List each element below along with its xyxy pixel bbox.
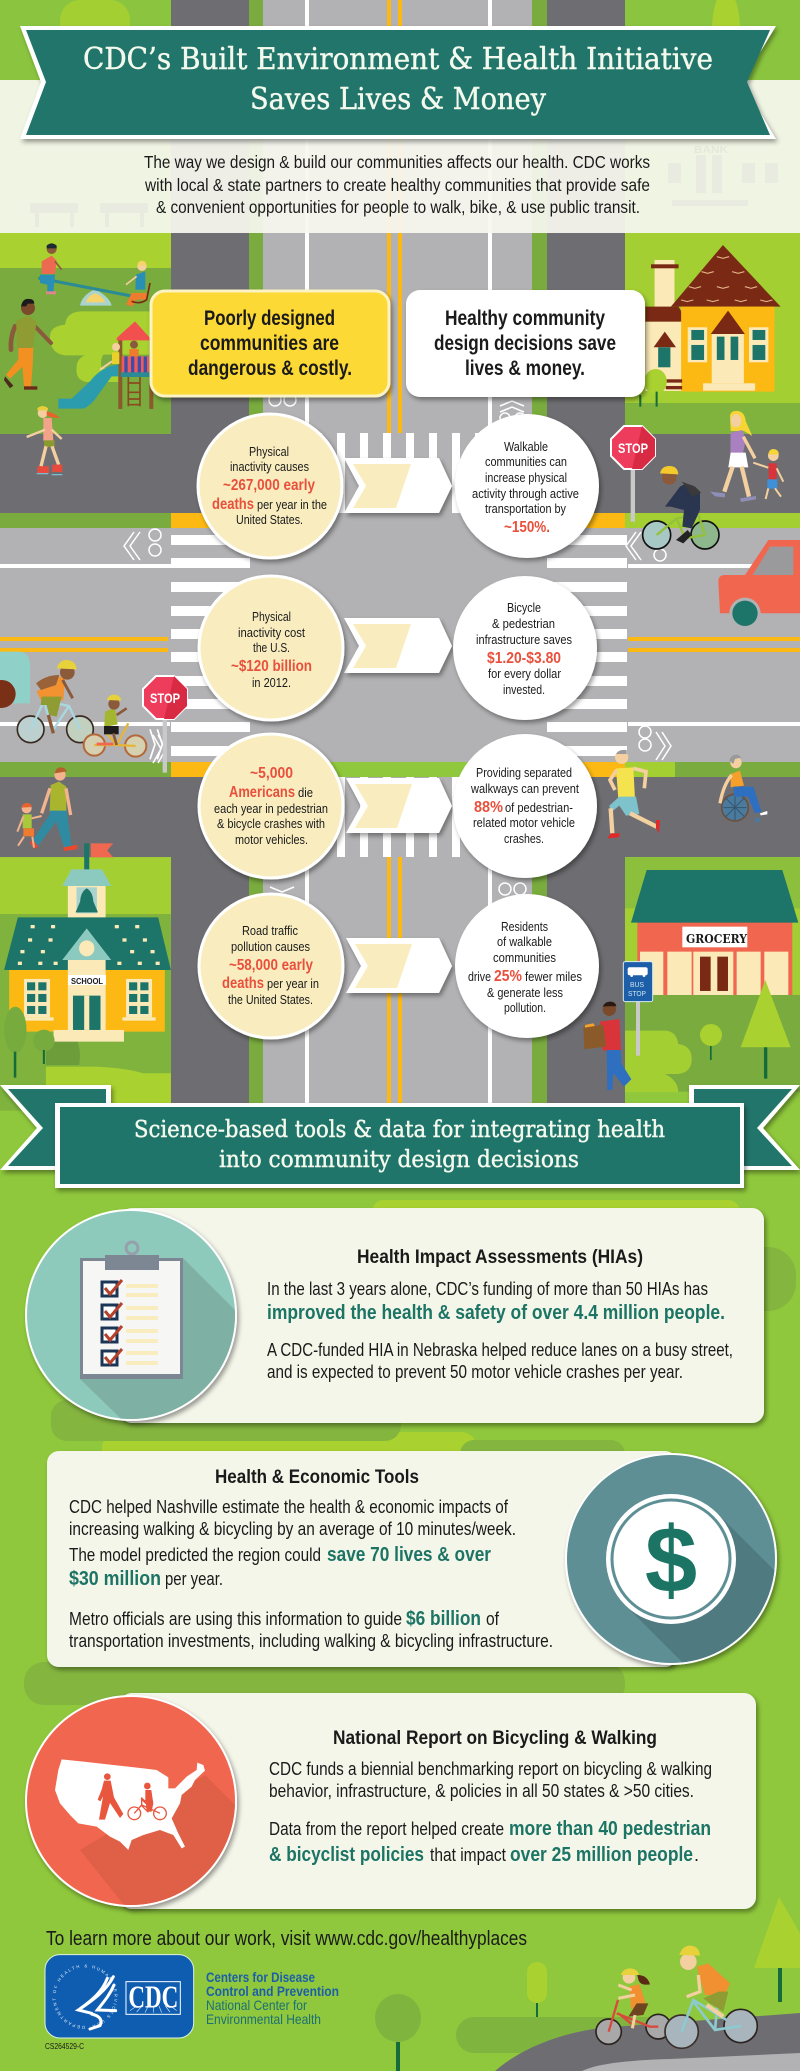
banner title text: CDC’s Built Environment & Health Initiative [83,42,713,77]
panel text: over 25 million people [510,1844,693,1866]
heading box: poorly designed: communities are [200,332,339,355]
child cyclist [596,1968,671,2044]
stop sign right [611,426,655,469]
circle: walkable residents: Residents [501,919,548,934]
heading box: poorly designed [151,291,389,396]
bike lane chevrons [150,729,162,759]
runner [607,750,660,838]
circle: walkable residents: 25% [494,968,522,985]
panel text: improved the health & safety of over 4.4 million people. [267,1302,725,1324]
child cyclist [84,695,146,757]
document code: CS264529-C [45,2042,84,2051]
section banner text [134,1117,665,1173]
circle: physical inactivity deaths: United States. [236,512,303,527]
circle: americans die: Americans [229,784,295,801]
icon: clipboard circle [24,1209,242,1426]
slide [58,365,118,409]
walking man [4,299,51,390]
stop sign post [631,467,635,522]
HHS and CDC logo: DEPARTMENT OF HEALTH & HUMAN SERVICES USA [52,1964,118,2029]
house roof [671,245,781,307]
heading box: poorly designed: Poorly designed [204,307,335,330]
school trees [4,1007,55,1078]
heading box: healthy community: design decisions save [434,332,616,355]
panel text: save 70 lives & over [327,1544,491,1566]
panel text [269,1759,712,1866]
banner wings [0,1085,800,1170]
panel text: Metro officials are using this information to guide [69,1609,402,1629]
circle: separated walkways: crashes. [504,831,544,846]
cyclist [643,466,719,549]
panel heading: Health Impact Assessments (HIAs) [357,1246,643,1268]
circle: walkable communities: increase physical [485,470,567,485]
wheelchair user [720,755,767,823]
adult cyclist [17,660,93,743]
circle: infrastructure saves: infrastructure saves [476,632,572,647]
father and child walking [17,767,77,851]
stop sign left [143,676,187,719]
circle: walkable residents: of walkable [497,934,552,949]
panel text: $6 billion [406,1608,481,1630]
bus stop label: BUS [630,982,644,989]
bush [50,311,152,382]
intro backdrop [0,80,800,233]
circle: separated walkways: Providing separated [476,765,572,780]
intro text: & convenient opportunities for people to walk, bike, & use public transit. [156,197,640,217]
circle: road traffic pollution: pollution causes [231,939,310,954]
panel heading: Health & Economic Tools [215,1466,419,1488]
panel text: and is expected to prevent 50 motor vehicle crashes per year. [267,1362,683,1382]
bus stop sign [623,962,653,1056]
circle: inactivity cost: inactivity cost [238,625,305,640]
school bell tower [62,869,111,938]
skater [27,406,62,475]
panel text: of [486,1609,500,1629]
panel heading: National Report on Bicycling & Walking [333,1727,657,1749]
panel text: transportation investments, including walking & bicycling infrastructure. [69,1631,553,1651]
house illustration [639,245,781,407]
circle: walkable residents: & generate less [487,985,563,1000]
lower decorative hills [24,1200,800,2071]
circle: separated walkways: 88% [474,799,503,816]
bus stop label: STOP [628,991,646,998]
icon: dollar coin [564,1453,782,1670]
circle: walkable residents [455,894,599,1038]
circle: walkable communities: activity through active [472,486,579,501]
circle: walkable communities: Walkable [504,439,548,454]
CDC organization text: Control and Prevention [206,1983,339,1999]
circle: separated walkways: walkways can prevent [470,781,579,796]
arrow row 3 [346,778,452,833]
circle: separated walkways [453,734,597,878]
panel text: increasing walking & bicycling by an average of 10 minutes/week. [69,1519,516,1539]
chimney [651,260,679,307]
panel text: behavior, infrastructure, & policies in all 50 states & >50 cities. [269,1781,694,1801]
circle: americans die: motor vehicles. [235,832,308,847]
trees [700,980,791,1079]
arrow row 2 [344,618,452,673]
section banner [0,1085,800,1188]
HHS and CDC logo [44,1954,194,2038]
panel text: more than 40 pedestrian [509,1818,711,1840]
house body [645,307,774,392]
panel: health impact assessments [24,1208,769,1429]
circle: inactivity cost: in 2012. [252,675,291,690]
arrow row 4 [346,938,452,993]
house shrub [639,369,667,407]
section banner text: Science-based tools & data for integrating health [134,1117,665,1143]
CDC organization text: Centers for Disease [206,1969,315,1985]
panel text [69,1497,553,1651]
circle: infrastructure saves: & pedestrian [492,616,555,631]
circle: physical inactivity deaths: Physical [249,444,289,459]
right street: stop sign, pedestrians, cyclist, car [631,411,800,629]
panel text: CDC funds a biennial benchmarking report on bicycling & walking [269,1759,712,1779]
seesaw [38,278,133,306]
CDC organization text: National Center for [206,1997,307,2013]
seesaw kid two [126,261,150,306]
circle: separated walkways: of pedestrian- [505,800,573,815]
teal car [0,652,30,708]
seesaw kid one [40,243,62,294]
icon: dollar coin: $ [645,1507,697,1612]
heading box: healthy community: lives & money. [465,357,585,380]
circle: physical inactivity deaths [198,414,342,558]
circle: walkable residents: fewer miles [525,969,582,984]
icon: US map circle [24,1695,242,1912]
red car [718,540,800,629]
circle: walkable residents: drive [468,969,491,984]
stop sign post left [163,719,167,773]
circle: inactivity cost: the U.S. [253,640,290,655]
heading box: healthy community [406,290,645,397]
circle: road traffic pollution: deaths [222,975,264,992]
circle: physical inactivity deaths: per year in the [257,497,327,512]
school label: SCHOOL [71,976,103,986]
panel text: CDC helped Nashville estimate the health & economic impacts of [69,1497,509,1517]
circle: walkable residents: communities [493,950,556,965]
circle: americans die: & bicycle crashes with [217,816,325,831]
heading box: healthy community: Healthy community [445,307,605,330]
stop sign left: STOP [150,690,180,706]
panel: health and economic tools [46,1451,782,1673]
title banner [20,26,776,139]
circle: road traffic pollution: per year in [267,976,319,991]
banner title text: Saves Lives & Money [250,82,546,117]
panel text: per year. [165,1569,223,1589]
adult cyclist [665,1946,757,2048]
street scene background [0,0,800,1107]
man with groceries [583,1002,631,1090]
circle: road traffic pollution [199,894,343,1038]
intro text: The way we design & build our communities affects our health. CDC works [144,152,650,172]
heading box: poorly designed: dangerous & costly. [188,357,352,380]
circle: infrastructure saves: for every dollar [488,666,562,681]
circle: americans die: die [298,785,313,800]
circle: infrastructure saves: invested. [503,682,545,697]
circle: inactivity cost: Physical [252,609,291,624]
footer call to action: To learn more about our work, visit www.cdc.gov/healthyplaces [46,1928,527,1950]
panel text [267,1279,733,1382]
circle: physical inactivity deaths: deaths [212,496,254,513]
panel text: In the last 3 years alone, CDC’s funding of more than 50 HIAs has [267,1279,708,1299]
CDC organization text [206,1969,339,2027]
grocery building [631,870,798,995]
school body [9,928,165,1042]
playground: seesaw, playset, walking man and skater [4,243,153,475]
circle: separated walkways: related motor vehicle [473,815,575,830]
grocery grounds [625,857,800,1092]
circle: inactivity cost: ~$120 billion [231,658,312,675]
panel text: $30 million [69,1568,161,1590]
circle: walkable communities: transportation by [485,501,566,516]
circle: walkable communities [455,414,599,558]
panel text: Data from the report helped create [269,1819,504,1839]
panel text: that impact [430,1845,506,1865]
circle: physical inactivity deaths: ~267,000 early [223,477,315,494]
family cycling [596,1946,757,2048]
circle: walkable communities: communities can [485,454,567,469]
circle: physical inactivity deaths: inactivity causes [230,459,309,474]
right lower street: runner, wheelchair user, grocery, bus stop [583,750,800,1092]
HHS and CDC logo: CDC [128,1980,178,2015]
intro backdrop: BANK [694,145,729,156]
panel text: . [694,1845,699,1865]
circle: infrastructure saves: $1.20-$3.80 [487,650,561,667]
child walking [753,449,783,499]
circle: road traffic pollution: ~58,000 early [229,957,313,974]
circle: infrastructure saves: Bicycle [507,600,541,615]
circle: americans die [199,734,343,878]
section banner text: into community design decisions [219,1147,579,1173]
woman walking [710,411,756,502]
child on slide [100,343,120,370]
playset [117,321,153,409]
CDC organization text: Environmental Health [206,2011,321,2027]
circle: inactivity cost [199,576,343,720]
stop sign right: STOP [618,440,648,456]
grocery label: GROCERY [686,932,747,946]
circle: infrastructure saves [453,576,597,720]
circle: americans die: each year in pedestrian [214,801,328,816]
panel text: & bicyclist policies [269,1844,424,1866]
circle: road traffic pollution: Road traffic [242,923,298,938]
arrow row 1 [344,458,452,513]
circle: americans die: ~5,000 [250,765,293,782]
circle: walkable residents: pollution. [504,1000,546,1015]
banner title text [83,42,713,117]
intro text [144,152,650,217]
intro text: with local & state partners to create healthy communities that provide safe [144,175,650,195]
school grounds with school building [0,843,171,1111]
circle: road traffic pollution: the United States. [228,992,313,1007]
school roof [4,917,171,970]
circle: walkable communities: ~150%. [504,519,550,536]
left street: car, family cyclists, pedestrians [0,652,167,851]
panel text: The model predicted the region could [69,1545,321,1565]
bus stop label [628,982,646,998]
school flag [84,843,113,870]
panel: national report [24,1693,761,1915]
